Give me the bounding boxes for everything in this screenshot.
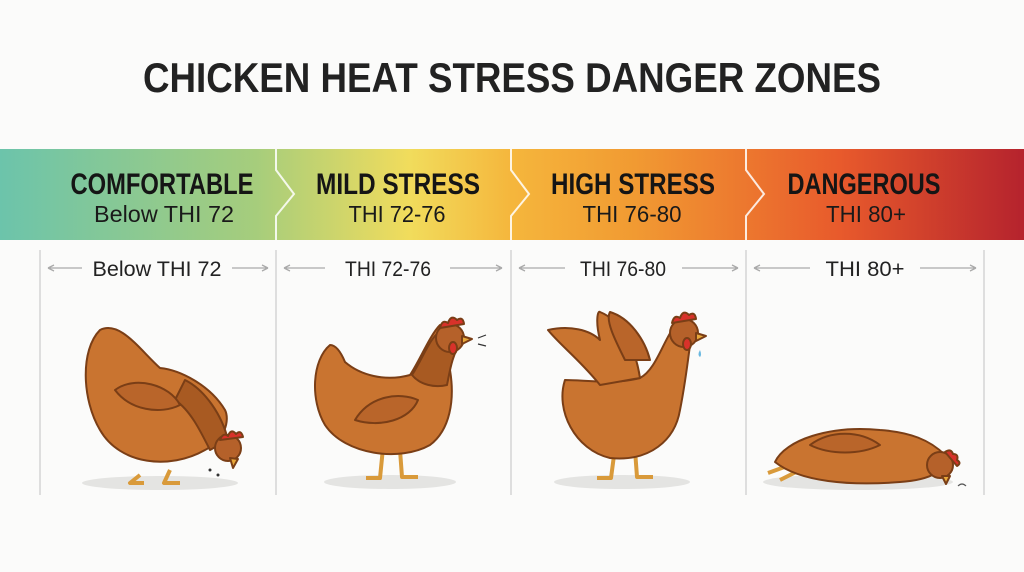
zone heading: dangerous: THI 80+ [826,201,906,227]
zone heading: mild stress: MILD STRESS [316,168,480,201]
chicken: dangerous (collapsed) [763,429,966,490]
range labels with arrows: Below THI 72 [92,258,222,281]
chicken: high stress (wings spread) [548,312,706,489]
zone heading: mild stress [316,168,480,227]
zone heading: comfortable: Below THI 72 [94,201,234,227]
title: CHICKEN HEAT STRESS DANGER ZONES [143,54,881,101]
zone heading: comfortable: COMFORTABLE [70,168,254,201]
zone heading: high stress: THI 76-80 [582,201,682,227]
gradient band [0,149,1024,240]
chicken: comfortable (pecking) [82,328,243,490]
zone heading: high stress: HIGH STRESS [551,168,715,201]
zone heading: high stress [551,168,715,227]
zone heading: mild stress: THI 72-76 [348,201,446,227]
chicken: mild stress (standing, panting) [315,318,486,489]
range labels with arrows: THI 80+ [826,258,904,281]
zone heading: dangerous [788,168,940,227]
zone heading: comfortable [70,168,254,227]
range labels with arrows: THI 72-76 [345,258,431,281]
range labels with arrows [48,258,976,281]
zone heading: dangerous: DANGEROUS [788,168,940,201]
range labels with arrows: THI 76-80 [580,258,666,281]
